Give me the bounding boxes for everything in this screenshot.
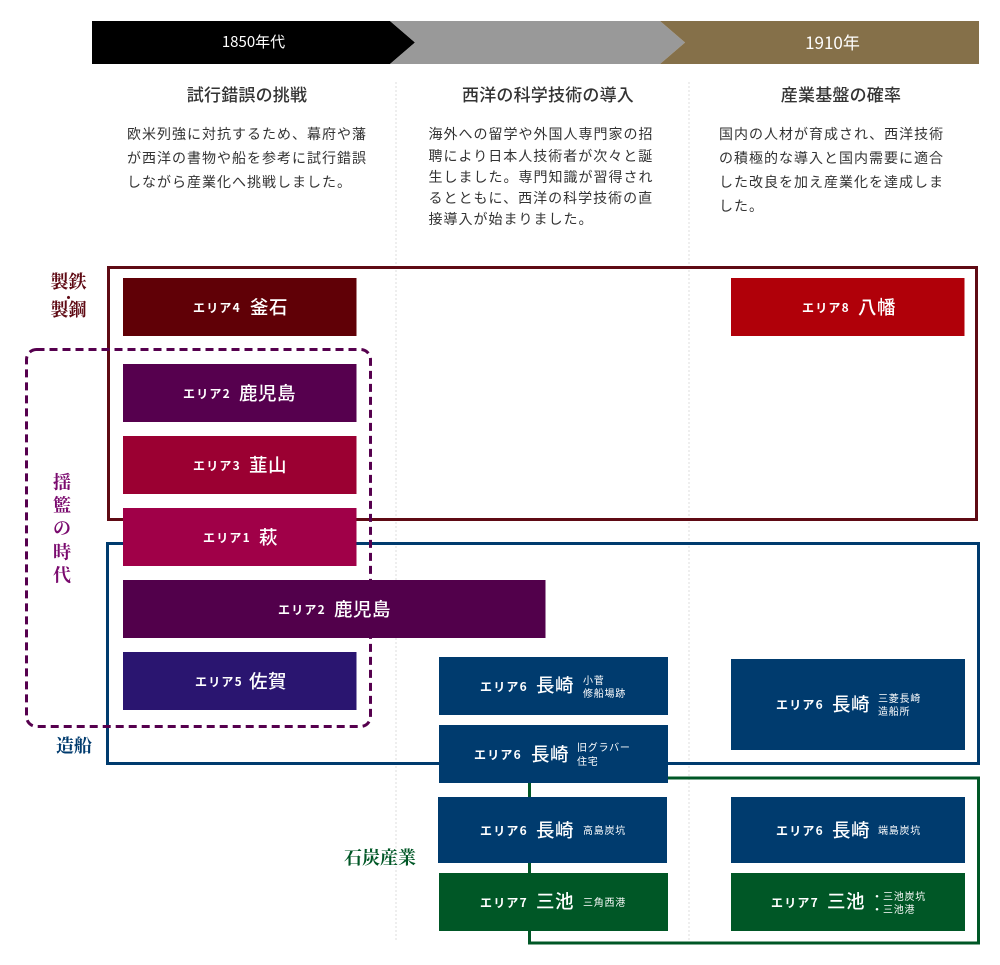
body: column 1 [127, 124, 367, 192]
frame: cradle era dashed [26, 350, 370, 726]
box: area 6 Nagasaki Glover: 長崎 [531, 741, 569, 767]
frame: iron and steel [108, 268, 976, 520]
label: cradle era: 揺 [53, 472, 71, 492]
body: column 3: した。 [719, 196, 764, 216]
label: shipbuilding: 造船 [56, 736, 92, 756]
box: area 2 Kagoshima long [123, 580, 546, 638]
body: column 2 [428, 124, 654, 229]
box: area 8 Yawata: 八幡 [858, 294, 896, 320]
box: area 6 Nagasaki Mitsubishi: 造船所 [878, 703, 910, 718]
box: area 3 Nirayama: エリア3 [193, 457, 241, 474]
label: cradle era: 時 [53, 542, 71, 562]
label: iron and steel: 製鉄 [50, 271, 86, 292]
box: area 2 Kagoshima [123, 364, 356, 422]
body: column 3: した改良を加え産業化を達成しま [719, 172, 944, 192]
body: column 2: 生しました。専門知識が習得され [428, 167, 654, 187]
box: area 4 Kamaishi [123, 278, 356, 336]
label: cradle era: 代 [53, 566, 71, 586]
box: area 2 Kagoshima: 鹿児島 [239, 380, 296, 406]
body: column 1: 欧米列強に対抗するため、幕府や藩 [127, 124, 367, 144]
box: area 6 Nagasaki Kosuge: エリア6 [480, 678, 528, 695]
box: area 2 Kagoshima: エリア2 [183, 385, 231, 402]
box: area 6 Nagasaki Takashima: 長崎 [536, 817, 574, 843]
box: area 6 Nagasaki Takashima: エリア6 [480, 822, 528, 839]
box: area 4 Kamaishi: エリア4 [193, 299, 241, 316]
box: area 8 Yawata [731, 278, 964, 336]
arrow segment: 1910: 1910年 [805, 29, 860, 54]
label: iron and steel [50, 271, 86, 320]
box: area 7 Miike Misumi: エリア7 [480, 894, 528, 911]
box: area 7 Miike coal mine and port: ・ [872, 888, 883, 903]
box: area 6 Nagasaki Glover [439, 725, 668, 783]
box: area 2 Kagoshima long: エリア2 [278, 601, 326, 618]
box: area 6 Nagasaki Hashima: 端島炭坑 [878, 822, 921, 837]
box: area 7 Miike Misumi: 三池 [536, 888, 574, 914]
body: column 3: の積極的な導入と国内需要に適合 [719, 148, 944, 168]
column 3 text [719, 81, 944, 216]
frame: shipbuilding [108, 544, 978, 764]
arrow segment: 1850s [92, 21, 415, 64]
body: column 3: 国内の人材が育成され、西洋技術 [719, 124, 944, 144]
box: area 6 Nagasaki Mitsubishi: 三菱長崎 [878, 690, 921, 705]
timeline arrow [92, 21, 979, 64]
body: column 3 [719, 124, 944, 216]
box: area 7 Miike Misumi [439, 873, 668, 931]
box: area 6 Nagasaki Kosuge: 小菅 [583, 672, 604, 687]
box: area 6 Nagasaki Hashima: エリア6 [776, 822, 824, 839]
box: area 6 Nagasaki Kosuge [439, 657, 668, 715]
column 1 text [127, 81, 367, 192]
column 2 text [428, 81, 654, 229]
box: area 6 Nagasaki Mitsubishi: エリア6 [776, 696, 824, 713]
body: column 2: るとともに、西洋の科学技術の直 [428, 188, 653, 208]
heading: column 3: 産業基盤の確率 [781, 81, 901, 106]
label: cradle era: 籃 [53, 496, 71, 516]
box: area 6 Nagasaki Mitsubishi [731, 659, 965, 750]
box: area 5 Saga: エリア5 [195, 673, 243, 690]
box: area 3 Nirayama [123, 436, 356, 494]
box: area 3 Nirayama: 韮山 [249, 452, 287, 478]
body: column 2: 接導入が始まりました。 [428, 209, 594, 229]
body: column 2: 聘により日本人技術者が次々と誕 [428, 146, 653, 166]
arrow segment: 1850s: 1850年代 [222, 31, 285, 52]
label: cradle era: の [53, 518, 71, 538]
box: area 6 Nagasaki Hashima: 長崎 [832, 817, 870, 843]
box: area 6 Nagasaki Hashima [731, 797, 965, 863]
box: area 7 Miike coal mine and port: ・ [872, 901, 883, 916]
box: area 7 Miike coal mine and port [731, 873, 965, 931]
box: area 2 Kagoshima long: 鹿児島 [334, 596, 391, 622]
body: column 1: しながら産業化へ挑戦しました。 [127, 172, 352, 192]
arrow segment: middle [390, 21, 685, 64]
box: area 5 Saga [123, 652, 356, 710]
box: area 1 Hagi [123, 508, 356, 566]
box: area 5 Saga: 佐賀 [249, 668, 287, 694]
arrow segment: 1910 [660, 21, 979, 64]
box: area 6 Nagasaki Takashima [438, 797, 667, 863]
box: area 4 Kamaishi: 釜石 [250, 294, 288, 320]
heading: column 1: 試行錯誤の挑戦 [187, 81, 307, 106]
box: area 7 Miike coal mine and port: 三池港 [883, 901, 915, 916]
box: area 1 Hagi: 萩 [259, 524, 278, 550]
box: area 7 Miike coal mine and port: 三池炭坑 [883, 888, 926, 903]
box: area 6 Nagasaki Takashima: 高島炭坑 [583, 822, 626, 837]
label: iron and steel: ・ [62, 292, 76, 307]
box: area 6 Nagasaki Glover: 住宅 [577, 753, 598, 768]
box: area 6 Nagasaki Glover: 旧グラバー [577, 739, 631, 754]
box: area 6 Nagasaki Glover: エリア6 [474, 746, 522, 763]
heading: column 2: 西洋の科学技術の導入 [462, 81, 634, 106]
box: area 6 Nagasaki Mitsubishi: 長崎 [832, 691, 870, 717]
box: area 1 Hagi: エリア1 [203, 529, 251, 546]
box: area 7 Miike coal mine and port: 三池 [827, 888, 865, 914]
box: area 8 Yawata: エリア8 [802, 299, 850, 316]
box: area 7 Miike coal mine and port: エリア7 [771, 894, 819, 911]
label: cradle era [53, 472, 71, 586]
frame: coal industry [530, 778, 978, 943]
box: area 6 Nagasaki Kosuge: 修船場跡 [583, 685, 626, 700]
label: iron and steel: 製鋼 [50, 299, 86, 320]
body: column 2: 海外への留学や外国人専門家の招 [428, 124, 654, 144]
box: area 7 Miike Misumi: 三角西港 [583, 894, 626, 909]
label: coal industry: 石炭産業 [344, 847, 416, 868]
body: column 1: が西洋の書物や船を参考に試行錯誤 [127, 148, 367, 168]
box: area 6 Nagasaki Kosuge: 長崎 [536, 672, 574, 698]
